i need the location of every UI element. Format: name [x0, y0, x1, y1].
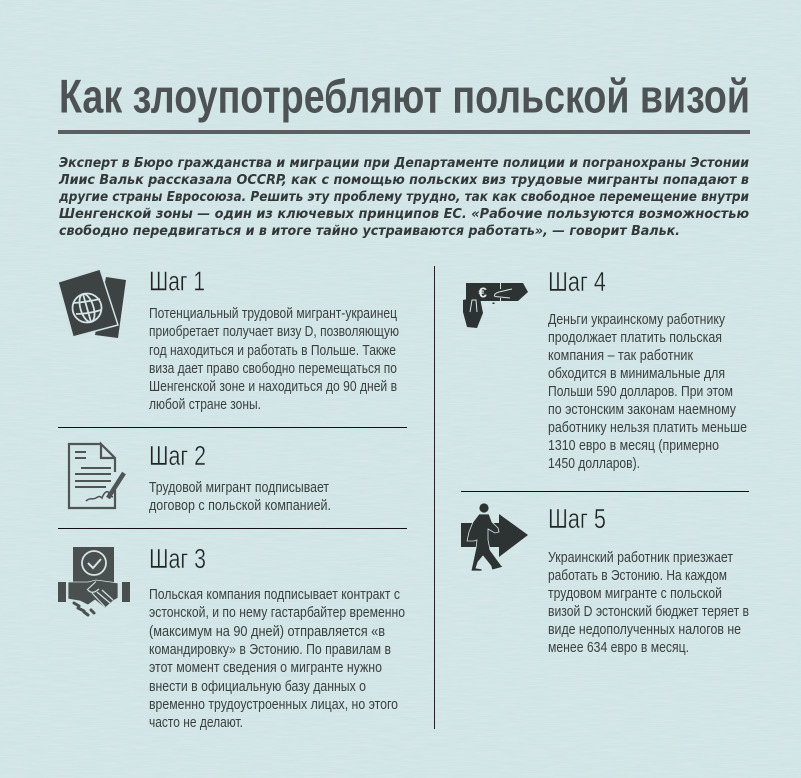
intro paragraph: Лиис Вальк рассказала OCCRP, как с помощью польских виз трудовые мигранты попадают в — [58, 173, 749, 188]
step 5 text: работать в Эстонию. На каждом — [548, 568, 727, 584]
step 4 text: 1450 долларов). — [548, 456, 640, 472]
step 3 text: эстонской, и по нему гастарбайтер временно — [149, 605, 405, 621]
panel: step 2 — [69, 440, 331, 514]
step 2 text — [149, 480, 331, 514]
step 3 text: этот момент сведения о мигранте нужно — [149, 660, 382, 676]
intro paragraph — [58, 156, 749, 239]
step 1 text: любой стране зоны. — [149, 397, 261, 413]
step 4 text: по эстонским законам наемному — [548, 402, 737, 418]
step 4 text: работнику нельзя платить меньше — [548, 420, 747, 436]
step 3 text: (максимум на 90 дней) отправляется «в — [149, 624, 385, 640]
step 1 text — [149, 306, 399, 413]
icon: hands passing euro note — [463, 283, 528, 328]
step 4 text: продолжает платить польская — [548, 330, 722, 346]
step 1 text: год находиться и работать в Польше. Также — [149, 343, 396, 359]
step 3 text: внести в официальную базу данных о — [149, 679, 366, 695]
icon: hands passing euro note: € — [478, 284, 488, 302]
panel: step 4 — [463, 266, 747, 472]
step 3 text: часто не делают. — [149, 715, 243, 731]
step 3 text: временно трудоустроенных лицах, но этого — [149, 697, 398, 713]
step 2 text: договор с польской компанией. — [149, 498, 331, 514]
step 5 text: визой D эстонский бюджет теряет в — [548, 604, 749, 620]
step 4 text — [548, 312, 747, 472]
step 1 text: Потенциальный трудовой мигрант-украинец — [149, 306, 397, 322]
step 2 heading: Шаг 2 — [149, 440, 206, 471]
panel: step 1 — [58, 266, 399, 413]
step 4 text: обходится в минимальные для — [548, 366, 725, 382]
step 4 heading: Шаг 4 — [548, 266, 606, 297]
icon: passport — [58, 269, 126, 338]
step 2 text: Трудовой мигрант подписывает — [149, 480, 329, 496]
intro paragraph: Эксперт в Бюро гражданства и миграции при Департаменте полиции и погранохраны Эстонии — [59, 156, 749, 171]
step 1 heading: Шаг 1 — [149, 266, 205, 296]
step 5 text — [548, 550, 749, 656]
step 4 text: Польши 590 долларов. При этом — [548, 384, 733, 400]
step 3 text: командировку» в Эстонию. По правилам в — [149, 642, 391, 658]
step 1 text: Шенгенской зоне и находиться до 90 дней в — [149, 379, 397, 395]
intro paragraph: свободно передвигаться и в итоге тайно устраиваются работать», — говорит Вальк. — [59, 223, 680, 239]
step 5 text: Украинский работник приезжает — [548, 550, 733, 566]
intro paragraph: Шенгенской зоны — один из ключевых принципов ЕС. «Рабочие пользуются возможностью — [59, 206, 749, 222]
step 3 text: Польская компания подписывает контракт с — [149, 587, 400, 603]
step 4 text: 1310 евро в месяц (примерно — [548, 438, 719, 454]
step 5 text: виде недополученных налогов не — [548, 622, 741, 638]
icon: signed document — [69, 444, 124, 508]
step 1 text: виза дает право свободно перемещаться по — [149, 361, 397, 377]
step 3 text — [149, 587, 405, 731]
panel: step 3 — [58, 543, 405, 731]
panel: step 5 — [461, 503, 749, 656]
step 3 heading: Шаг 3 — [149, 543, 206, 574]
step 5 text: трудовом мигранте с польской — [548, 586, 722, 602]
step 1 text: приобретает получает визу D, позволяющую — [149, 324, 399, 340]
step 5 text: менее 634 евро в месяц. — [548, 640, 689, 656]
icon: man walking past arrow — [461, 503, 528, 571]
icon: handshake with check mark — [58, 547, 130, 615]
step 4 text: Деньги украинскому работнику — [548, 312, 726, 328]
step 4 text: компания – так работник — [548, 348, 694, 364]
step 5 heading: Шаг 5 — [548, 503, 606, 534]
